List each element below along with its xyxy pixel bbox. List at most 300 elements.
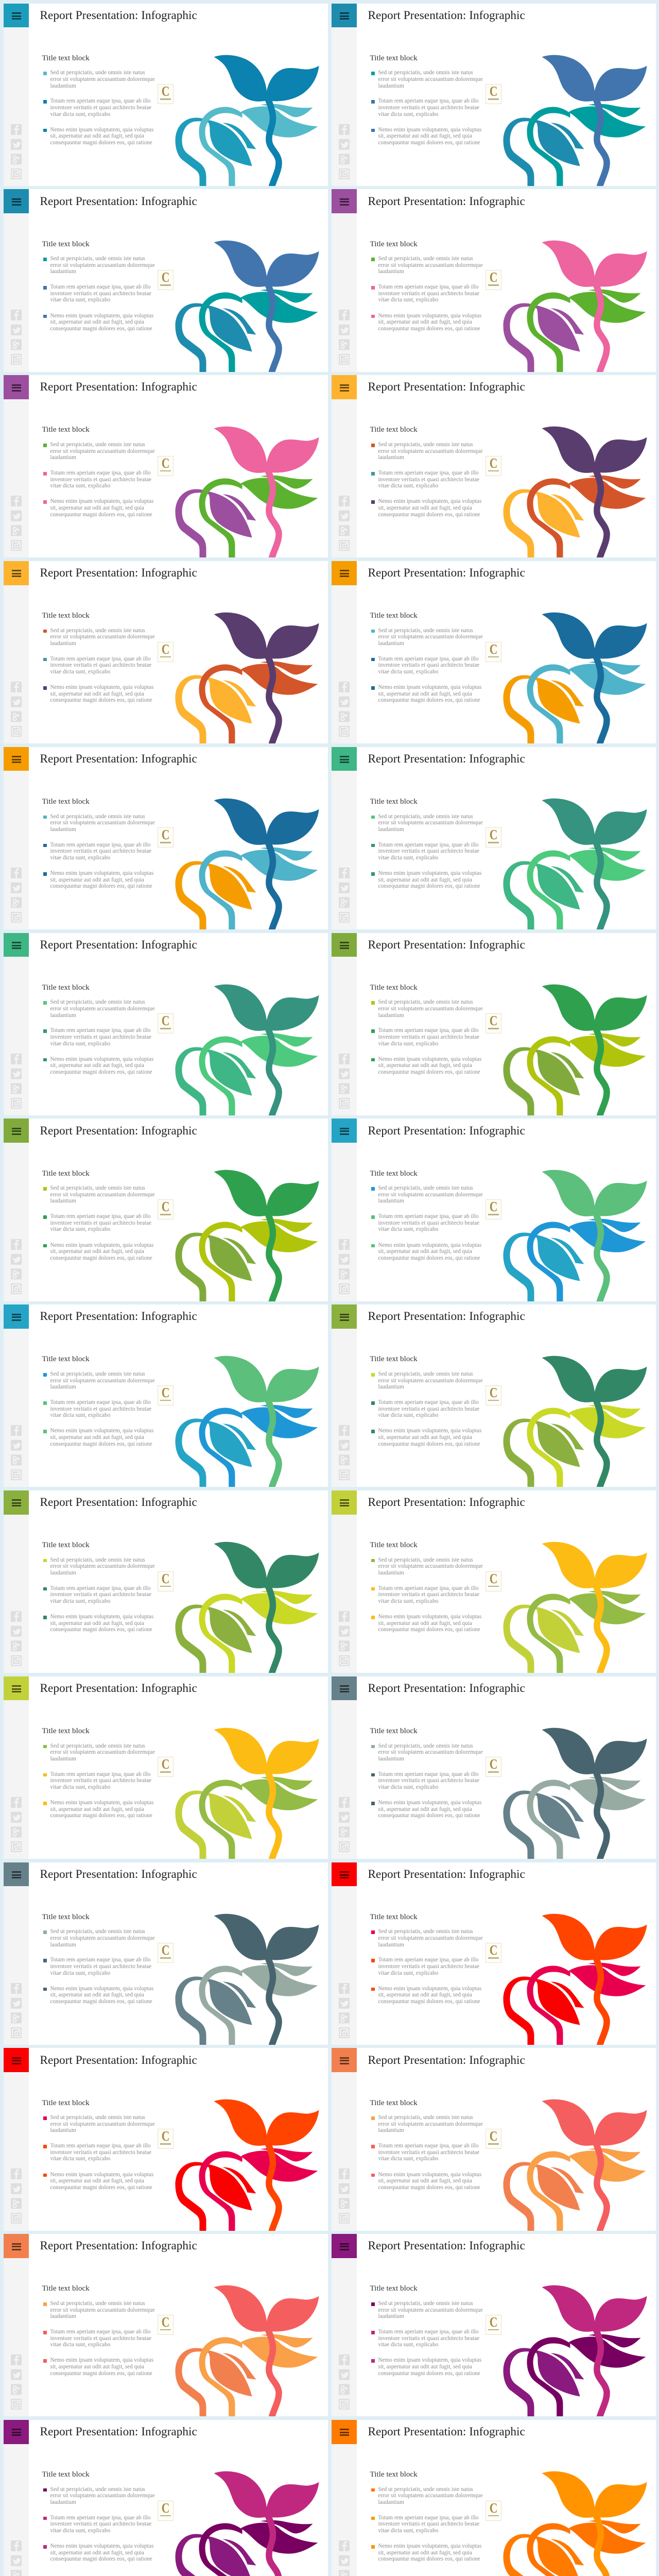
bullet 2: Totam rem aperiam eaque ipsa, quae ab illo — [50, 98, 150, 104]
bullet 1: Sed ut perspiciatis, unde omnis iste natus — [378, 256, 473, 262]
text block — [42, 1540, 162, 1638]
header tab with menu icon — [3, 933, 29, 957]
bullet 2: vitae dicta sunt, explicabo — [50, 297, 110, 303]
bullet 2: vitae dicta sunt, explicabo — [378, 2156, 438, 2162]
bullet 3 — [50, 1242, 153, 1261]
bullet 2: inventore veritatis et quasi architecto beatae — [378, 848, 479, 854]
bullet 3 — [378, 2172, 481, 2191]
plant illustration — [3, 1862, 327, 2045]
text block — [42, 611, 155, 703]
watermark badge — [158, 827, 174, 848]
bullet 1: Sed ut perspiciatis, unde omnis iste natus — [378, 2300, 473, 2307]
title: Report Presentation: Infographic — [40, 1496, 197, 1509]
social icons — [339, 1611, 350, 1666]
bullet 2: inventore veritatis et quasi architecto beatae — [378, 1591, 479, 1598]
text block — [370, 2284, 489, 2382]
header tab with menu icon — [332, 1304, 357, 1329]
bullet 3: consequuntur magni dolores eos, qui ratione — [378, 1255, 480, 1261]
bullet 1: Sed ut perspiciatis, unde omnis iste natus — [50, 1371, 145, 1377]
heading: Title text block — [42, 983, 90, 992]
panel: slide 25 — [3, 2234, 327, 2416]
bullet 1 — [50, 628, 155, 647]
bullet 1: Sed ut perspiciatis, unde omnis iste natus — [378, 628, 473, 634]
bullet 3: consequuntur magni dolores eos, qui ratione — [378, 2556, 480, 2562]
text block — [370, 1169, 489, 1267]
watermark badge — [158, 270, 174, 290]
bullet 1: laudantium — [378, 1570, 404, 1576]
bullet 3: sit, aspernatur aut odit aut fugit, sed quia — [50, 1062, 144, 1069]
bullet 3: Nemo enim ipsam voluptatem, quia voluptas — [50, 127, 153, 133]
text block — [42, 797, 155, 889]
bullet 1 — [378, 2486, 483, 2506]
plant illustration — [332, 1490, 656, 1673]
bullet 1: laudantium — [50, 1756, 76, 1762]
bullet 3 — [50, 498, 153, 518]
bullet 1: laudantium — [378, 2127, 404, 2133]
header tab with menu icon — [3, 1490, 29, 1515]
bullet 2: vitae dicta sunt, explicabo — [378, 855, 438, 861]
plant illustration — [503, 427, 647, 557]
plant illustration — [175, 240, 319, 372]
header tab with menu icon — [332, 1676, 357, 1700]
panel: slide 3 — [3, 189, 327, 372]
bullet 2: inventore veritatis et quasi architecto beatae — [50, 1591, 151, 1598]
bullet 2: Totam rem aperiam eaque ipsa, quae ab illo — [50, 656, 150, 662]
sidebar — [3, 2234, 29, 2416]
bullet 3: consequuntur magni dolores eos, qui ratione — [50, 512, 152, 518]
bullet 2 — [50, 284, 151, 303]
plant illustration — [175, 1170, 319, 1301]
bullet 2: Totam rem aperiam eaque ipsa, quae ab illo — [378, 2515, 478, 2521]
bullet 3: sit, aspernatur aut odit aut fugit, sed quia — [378, 877, 472, 883]
bullet 3: Nemo enim ipsam voluptatem, quia voluptas — [50, 1056, 153, 1062]
title: Report Presentation: Infographic — [40, 2054, 197, 2067]
bullet 1: laudantium — [378, 83, 404, 89]
bullet 1 — [50, 1185, 155, 1205]
bullet 3: consequuntur magni dolores eos, qui ratione — [378, 1626, 480, 1633]
sidebar — [3, 2420, 29, 2576]
bullet 2: inventore veritatis et quasi architecto beatae — [50, 1220, 151, 1226]
plant illustration — [332, 1676, 656, 1859]
bullet 3 — [378, 1242, 481, 1261]
bullet 1: error sit voluptatem accusantium doloremque — [50, 2307, 155, 2313]
bullet 3: sit, aspernatur aut odit aut fugit, sed quia — [50, 1248, 144, 1255]
heading: Title text block — [370, 983, 418, 992]
social icons — [11, 1239, 22, 1294]
bullet 1: error sit voluptatem accusantium doloremque — [378, 1192, 483, 1198]
bullet 1: error sit voluptatem accusantium doloremque — [50, 820, 155, 826]
sidebar — [332, 1118, 357, 1301]
bullet 2 — [50, 2515, 151, 2534]
bullet 1 — [50, 2486, 155, 2506]
bullet 1: Sed ut perspiciatis, unde omnis iste natus — [50, 442, 145, 448]
heading: Title text block — [370, 1169, 418, 1178]
bullet 2 — [378, 2329, 479, 2348]
bullet 3 — [50, 2543, 153, 2563]
bullet 1: error sit voluptatem accusantium doloremque — [378, 2307, 483, 2313]
bullet 3: consequuntur magni dolores eos, qui ratione — [378, 697, 480, 703]
bullet 1: error sit voluptatem accusantium doloremque — [50, 634, 155, 640]
bullet 1: error sit voluptatem accusantium doloremque — [378, 76, 483, 82]
bullet 1: Sed ut perspiciatis, unde omnis iste natus — [50, 256, 145, 262]
bullet 2: Totam rem aperiam eaque ipsa, quae ab illo — [50, 2143, 150, 2149]
header tab with menu icon — [3, 2048, 29, 2072]
bullet 1: Sed ut perspiciatis, unde omnis iste natus — [50, 2114, 145, 2121]
text block — [42, 1354, 162, 1452]
title: Report Presentation: Infographic — [368, 2425, 525, 2438]
bullet 1: laudantium — [50, 826, 76, 833]
bullet 2: inventore veritatis et quasi architecto beatae — [378, 291, 479, 297]
panel: slide 4 — [332, 189, 656, 372]
social icons — [339, 1239, 350, 1294]
text block — [42, 1169, 155, 1261]
bullet 3 — [50, 870, 153, 890]
social icons — [11, 1611, 22, 1666]
panel: slide 14 — [332, 1118, 656, 1301]
bullet 3 — [50, 1428, 153, 1447]
bullet 2: inventore veritatis et quasi architecto beatae — [50, 2149, 151, 2156]
bullet 2: vitae dicta sunt, explicabo — [50, 1226, 110, 1232]
bullet 1: error sit voluptatem accusantium doloremque — [378, 1378, 483, 1384]
panel: slide 16 — [332, 1304, 656, 1487]
bullet 2: vitae dicta sunt, explicabo — [50, 1041, 110, 1047]
text block — [42, 240, 155, 332]
bullet 3 — [378, 2543, 481, 2563]
bullet 3 — [50, 1986, 153, 2005]
bullet 1: error sit voluptatem accusantium doloremque — [50, 1563, 155, 1569]
watermark badge — [158, 1571, 174, 1591]
bullet 3 — [378, 498, 481, 518]
bullet 1: error sit voluptatem accusantium doloremque — [50, 1006, 155, 1012]
plant illustration — [175, 984, 319, 1115]
bullet 2 — [378, 2143, 479, 2162]
panel: slide 18 — [332, 1490, 656, 1673]
bullet 2 — [50, 2143, 151, 2162]
bullet 1: Sed ut perspiciatis, unde omnis iste natus — [378, 442, 473, 448]
panel: slide 19 — [3, 1676, 327, 1859]
title: Report Presentation: Infographic — [40, 752, 197, 766]
bullet 2: inventore veritatis et quasi architecto beatae — [50, 1777, 151, 1784]
social icons — [339, 1797, 350, 1852]
plant illustration — [332, 2234, 656, 2416]
panel: slide 23 — [3, 2048, 327, 2231]
bullet 3: sit, aspernatur aut odit aut fugit, sed quia — [50, 2364, 144, 2370]
bullet 2: vitae dicta sunt, explicabo — [378, 1041, 438, 1047]
watermark badge — [158, 2129, 174, 2149]
bullet 2: inventore veritatis et quasi architecto beatae — [378, 477, 479, 483]
bullet 1: error sit voluptatem accusantium doloremque — [378, 2121, 483, 2127]
header tab with menu icon — [332, 747, 357, 771]
social icons — [11, 124, 22, 179]
bullet 2: inventore veritatis et quasi architecto beatae — [50, 662, 151, 668]
bullet 3: Nemo enim ipsam voluptatem, quia voluptas — [378, 2172, 481, 2178]
header tab with menu icon — [3, 561, 29, 585]
bullet 2 — [50, 842, 151, 861]
bullet 2: vitae dicta sunt, explicabo — [50, 1412, 110, 1418]
sidebar — [3, 2048, 29, 2231]
bullet 3: sit, aspernatur aut odit aut fugit, sed quia — [50, 319, 144, 325]
bullet 3: sit, aspernatur aut odit aut fugit, sed quia — [378, 691, 472, 697]
plant illustration — [3, 2420, 327, 2576]
sidebar — [332, 747, 357, 929]
bullet 3: sit, aspernatur aut odit aut fugit, sed quia — [50, 2550, 144, 2556]
bullet 2: inventore veritatis et quasi architecto beatae — [378, 1777, 479, 1784]
bullet 3: sit, aspernatur aut odit aut fugit, sed quia — [378, 2178, 472, 2184]
bullet 2 — [378, 1585, 479, 1605]
bullet 3: consequuntur magni dolores eos, qui ratione — [50, 697, 152, 703]
bullet 3: sit, aspernatur aut odit aut fugit, sed quia — [378, 2550, 472, 2556]
bullet 1: Sed ut perspiciatis, unde omnis iste natus — [50, 814, 145, 820]
watermark badge — [158, 1943, 174, 1963]
bullet 3 — [378, 1800, 481, 1819]
title: Report Presentation: Infographic — [40, 195, 197, 208]
header tab with menu icon — [332, 2234, 357, 2258]
bullet 3: sit, aspernatur aut odit aut fugit, sed quia — [378, 1992, 472, 1998]
bullet 3 — [50, 2357, 153, 2377]
panel: slide 7 — [3, 561, 327, 743]
bullet 2 — [378, 1957, 479, 1976]
bullet 3 — [378, 127, 481, 146]
bullet 1: Sed ut perspiciatis, unde omnis iste natus — [378, 1743, 473, 1749]
heading: Title text block — [42, 1912, 90, 1921]
text block — [370, 1354, 489, 1452]
bullet 2: vitae dicta sunt, explicabo — [378, 1226, 438, 1232]
bullet 2: vitae dicta sunt, explicabo — [50, 1784, 110, 1790]
bullet 1: laudantium — [50, 1198, 76, 1204]
bullet 1: laudantium — [50, 454, 76, 461]
bullet 2: inventore veritatis et quasi architecto beatae — [378, 2521, 479, 2527]
bullet 3: Nemo enim ipsam voluptatem, quia voluptas — [378, 1614, 481, 1620]
bullet 2: Totam rem aperiam eaque ipsa, quae ab illo — [378, 2329, 478, 2335]
bullet 3: consequuntur magni dolores eos, qui ratione — [50, 1626, 152, 1633]
bullet 2: Totam rem aperiam eaque ipsa, quae ab illo — [378, 470, 478, 476]
bullet 1: laudantium — [378, 640, 404, 647]
panel: slide 21 — [3, 1862, 327, 2045]
bullet 1: Sed ut perspiciatis, unde omnis iste natus — [378, 999, 473, 1005]
bullet 1: error sit voluptatem accusantium doloremque — [50, 2493, 155, 2499]
bullet 1: error sit voluptatem accusantium doloremque — [378, 262, 483, 268]
bullet 3: consequuntur magni dolores eos, qui ratione — [378, 140, 480, 146]
bullet 2: vitae dicta sunt, explicabo — [50, 2342, 110, 2348]
bullet 2: vitae dicta sunt, explicabo — [378, 1598, 438, 1604]
bullet 3: sit, aspernatur aut odit aut fugit, sed quia — [50, 691, 144, 697]
sidebar — [3, 1490, 29, 1673]
bullet 1: error sit voluptatem accusantium doloremque — [50, 448, 155, 454]
bullet 2: inventore veritatis et quasi architecto beatae — [378, 1034, 479, 1040]
bullet 2: Totam rem aperiam eaque ipsa, quae ab illo — [50, 2329, 150, 2335]
text block — [370, 1540, 489, 1638]
bullet 2 — [50, 1771, 151, 1790]
bullet 3: Nemo enim ipsam voluptatem, quia voluptas — [378, 1056, 481, 1062]
bullet 2: Totam rem aperiam eaque ipsa, quae ab illo — [50, 2515, 150, 2521]
watermark badge — [485, 1757, 501, 1777]
plant illustration — [504, 55, 647, 186]
plant illustration — [3, 1304, 327, 1487]
panel: slide 8 — [332, 561, 656, 743]
social icons — [339, 496, 350, 551]
bullet 3: Nemo enim ipsam voluptatem, quia voluptas — [50, 498, 153, 504]
bullet 2: Totam rem aperiam eaque ipsa, quae ab illo — [50, 284, 150, 290]
bullet 3: Nemo enim ipsam voluptatem, quia voluptas — [50, 2357, 153, 2363]
bullet 3: sit, aspernatur aut odit aut fugit, sed quia — [50, 877, 144, 883]
watermark badge — [158, 1199, 174, 1219]
bullet 2: inventore veritatis et quasi architecto beatae — [378, 1963, 479, 1970]
bullet 3: sit, aspernatur aut odit aut fugit, sed quia — [378, 1434, 472, 1440]
bullet 3: Nemo enim ipsam voluptatem, quia voluptas — [378, 2357, 481, 2363]
plant illustration — [3, 1676, 327, 1859]
bullet 1: laudantium — [378, 268, 404, 275]
bullet 1: laudantium — [50, 2499, 76, 2505]
bullet 1: laudantium — [50, 1570, 76, 1576]
social icons — [11, 2168, 22, 2224]
bullet 3: Nemo enim ipsam voluptatem, quia voluptas — [50, 684, 153, 690]
bullet 1: laudantium — [50, 1384, 76, 1390]
panel: slide 22 — [332, 1862, 656, 2045]
bullet 2: Totam rem aperiam eaque ipsa, quae ab illo — [378, 1027, 478, 1033]
title: Report Presentation: Infographic — [368, 2054, 525, 2067]
bullet 2 — [50, 1585, 151, 1605]
bullet 2: Totam rem aperiam eaque ipsa, quae ab illo — [50, 842, 150, 848]
sidebar — [332, 2420, 357, 2576]
bullet 1: error sit voluptatem accusantium doloremque — [50, 1935, 155, 1941]
bullet 2: Totam rem aperiam eaque ipsa, quae ab illo — [378, 1213, 478, 1219]
bullet 3: consequuntur magni dolores eos, qui ratione — [50, 326, 152, 332]
bullet 1 — [378, 1928, 483, 1948]
bullet 2: Totam rem aperiam eaque ipsa, quae ab illo — [378, 284, 478, 290]
panel: slide 15 — [3, 1304, 327, 1487]
bullet 1: error sit voluptatem accusantium doloremque — [50, 1749, 155, 1755]
bullet 3 — [378, 1056, 481, 1076]
bullet 3: consequuntur magni dolores eos, qui ratione — [378, 2184, 480, 2191]
title: Report Presentation: Infographic — [368, 1868, 525, 1881]
bullet 3: consequuntur magni dolores eos, qui ratione — [50, 883, 152, 889]
heading: Title text block — [42, 611, 90, 620]
panel: slide 27 — [3, 2420, 327, 2576]
header tab with menu icon — [332, 3, 357, 27]
bullet 3 — [50, 1800, 153, 1819]
bullet 2 — [378, 470, 479, 489]
text block — [370, 425, 483, 518]
bullet 3: Nemo enim ipsam voluptatem, quia voluptas — [50, 2172, 153, 2178]
bullet 1 — [50, 1371, 155, 1391]
heading: Title text block — [42, 797, 90, 806]
bullet 1: Sed ut perspiciatis, unde omnis iste natus — [50, 1557, 145, 1563]
text block — [370, 797, 483, 889]
sidebar — [3, 375, 29, 557]
bullet 1: Sed ut perspiciatis, unde omnis iste natus — [378, 1928, 473, 1935]
bullet 1: laudantium — [378, 2313, 404, 2319]
heading: Title text block — [370, 240, 418, 248]
bullet 3: sit, aspernatur aut odit aut fugit, sed quia — [50, 133, 144, 139]
bullet 3: consequuntur magni dolores eos, qui ratione — [378, 1812, 480, 1819]
header tab with menu icon — [3, 2420, 29, 2444]
header tab with menu icon — [332, 933, 357, 957]
panel: slide 11 — [3, 933, 327, 1115]
panel: slide 24 — [332, 2048, 656, 2231]
title: Report Presentation: Infographic — [368, 1124, 525, 1138]
bullet 1: error sit voluptatem accusantium doloremque — [378, 1935, 483, 1941]
header tab with menu icon — [332, 1862, 357, 1886]
social icons — [339, 2540, 350, 2576]
bullet 2 — [378, 1027, 479, 1047]
panel: slide 2 — [332, 3, 656, 186]
bullet 3: sit, aspernatur aut odit aut fugit, sed quia — [50, 1806, 144, 1812]
bullet 1: Sed ut perspiciatis, unde omnis iste natus — [50, 628, 145, 634]
text block — [370, 2098, 489, 2196]
panel: slide 13 — [3, 1118, 327, 1301]
bullet 2: vitae dicta sunt, explicabo — [378, 2342, 438, 2348]
title: Report Presentation: Infographic — [40, 1682, 197, 1695]
header tab with menu icon — [332, 375, 357, 399]
watermark badge — [485, 1943, 501, 1963]
bullet 2: Totam rem aperiam eaque ipsa, quae ab illo — [378, 1399, 478, 1405]
bullet 2 — [50, 2329, 151, 2348]
sidebar — [332, 561, 357, 743]
sidebar — [3, 1676, 29, 1859]
bullet 3 — [50, 1056, 153, 1076]
bullet 1: laudantium — [50, 83, 76, 89]
bullet 3: Nemo enim ipsam voluptatem, quia voluptas — [378, 1986, 481, 1992]
bullet 2: vitae dicta sunt, explicabo — [378, 1784, 438, 1790]
heading: Title text block — [370, 1726, 418, 1735]
bullet 2: vitae dicta sunt, explicabo — [378, 111, 438, 117]
plant illustration — [332, 2048, 656, 2231]
header tab with menu icon — [3, 2234, 29, 2258]
bullet 1 — [50, 256, 155, 275]
bullet 2: vitae dicta sunt, explicabo — [378, 2528, 438, 2534]
sidebar — [3, 747, 29, 929]
heading: Title text block — [42, 54, 90, 62]
watermark badge — [485, 2501, 501, 2521]
title: Report Presentation: Infographic — [40, 2425, 197, 2438]
social icons — [11, 2354, 22, 2410]
bullet 2: inventore veritatis et quasi architecto beatae — [378, 2335, 479, 2342]
bullet 2 — [50, 1213, 151, 1233]
social icons — [339, 124, 350, 179]
bullet 1 — [378, 1557, 483, 1577]
bullet 2: Totam rem aperiam eaque ipsa, quae ab illo — [378, 2143, 478, 2149]
panel: slide 20 — [332, 1676, 656, 1859]
bullet 2: Totam rem aperiam eaque ipsa, quae ab illo — [378, 842, 478, 848]
header tab with menu icon — [3, 1862, 29, 1886]
bullet 2 — [378, 1399, 479, 1419]
bullet 1: laudantium — [50, 1012, 76, 1019]
heading: Title text block — [370, 2284, 418, 2293]
bullet 2: vitae dicta sunt, explicabo — [50, 855, 110, 861]
plant illustration — [503, 240, 647, 372]
watermark badge — [485, 456, 501, 476]
watermark badge — [485, 1199, 501, 1219]
bullet 1: Sed ut perspiciatis, unde omnis iste natus — [378, 2486, 473, 2493]
social icons — [339, 310, 350, 365]
bullet 3 — [378, 313, 481, 332]
bullet 1 — [50, 1743, 155, 1762]
title: Report Presentation: Infographic — [40, 380, 197, 394]
panel: slide 12 — [332, 933, 656, 1115]
bullet 1 — [50, 999, 155, 1019]
bullet 2 — [378, 1213, 479, 1233]
bullet 2: vitae dicta sunt, explicabo — [50, 2156, 110, 2162]
text block — [370, 240, 483, 332]
bullet 1 — [378, 1185, 483, 1205]
bullet 3: consequuntur magni dolores eos, qui ratione — [50, 2184, 152, 2191]
sidebar — [3, 933, 29, 1115]
watermark badge — [158, 456, 174, 476]
text block — [370, 983, 483, 1075]
bullet 3: consequuntur magni dolores eos, qui ratione — [378, 1998, 480, 2005]
bullet 3: Nemo enim ipsam voluptatem, quia voluptas — [50, 870, 153, 876]
bullet 1: Sed ut perspiciatis, unde omnis iste natus — [378, 70, 473, 76]
